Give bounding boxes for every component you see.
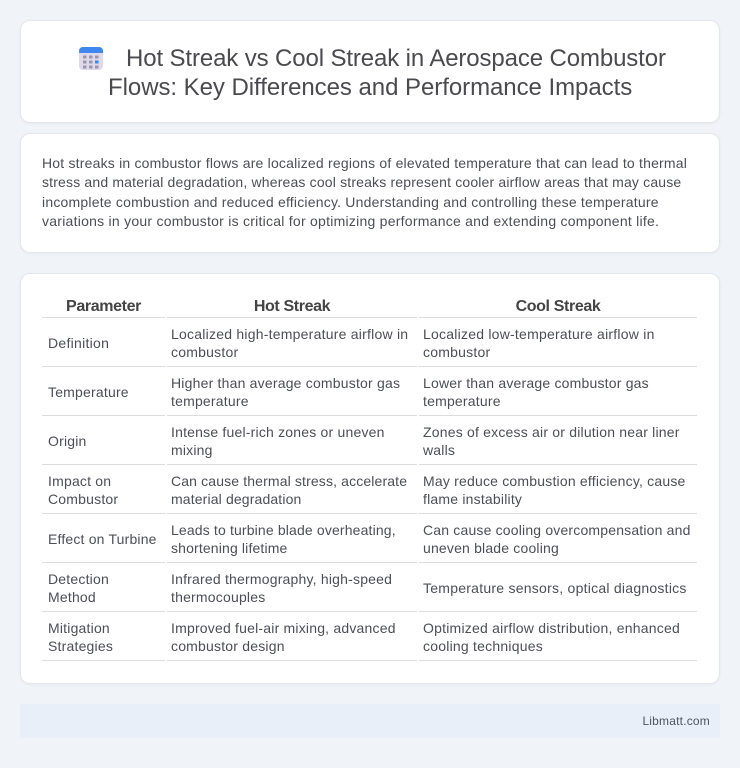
footer bar [20,704,720,738]
row: effect on turbine: uneven blade cooling [423,540,559,556]
row: mitigation strategies: Optimized airflow distribution, enhanced [423,620,680,636]
row: impact on combustor: Impact on [48,473,111,489]
row: temperature: Temperature [48,384,129,400]
row: origin [48,424,680,458]
intro text: Hot streaks in combustor flows are localized regions of elevated temperature that can lead to thermal [42,155,687,171]
table header [66,298,601,315]
row: origin: Origin [48,433,87,449]
row: definition: Localized low-temperature airflow in [423,326,655,342]
title: Flows: Key Differences and Performance Impacts [108,74,632,101]
title [108,45,666,101]
row: mitigation strategies: combustor design [171,638,285,654]
row: detection method: Infrared thermography, high-speed [171,571,392,587]
row: definition: combustor [423,344,490,360]
row: origin: walls [423,442,455,458]
intro text: variations in your combustor is critical for optimizing performance and extending component life. [42,213,659,229]
row: detection method: Method [48,589,96,605]
row: detection method: Detection [48,571,109,587]
row: definition: Localized high-temperature airflow in [171,326,408,342]
row: temperature: temperature [171,393,249,409]
row: impact on combustor: Can cause thermal stress, accelerate [171,473,407,489]
row: effect on turbine: Leads to turbine blade overheating, [171,522,396,538]
row: effect on turbine [48,522,691,556]
row: origin: mixing [171,442,213,458]
row: detection method: thermocouples [171,589,265,605]
row: temperature [48,375,649,409]
icon: calendar [79,47,103,70]
row: mitigation strategies: Improved fuel-air mixing, advanced [171,620,396,636]
row: origin: Zones of excess air or dilution near liner [423,424,680,440]
row: temperature: Lower than average combustor gas [423,375,649,391]
table header: Parameter [66,298,141,315]
row: definition: combustor [171,344,238,360]
row: mitigation strategies: Mitigation [48,620,110,636]
table header: Cool Streak [516,298,600,315]
header panel [20,20,720,123]
row: mitigation strategies [48,620,680,654]
intro text: incomplete combustion and reduced efficiency. Understanding and controlling these temperature [42,194,659,210]
intro panel [20,133,720,253]
row: definition [48,326,655,360]
row: mitigation strategies: Strategies [48,638,113,654]
row: impact on combustor [48,473,686,507]
row: effect on turbine: Can cause cooling overcompensation and [423,522,691,538]
row: detection method: Temperature sensors, optical diagnostics [423,580,687,596]
intro text [42,155,687,229]
row: impact on combustor: material degradation [171,491,301,507]
intro text: stress and material degradation, whereas cool streaks represent cooler airflow areas that may cause [42,174,681,190]
row: origin: Intense fuel-rich zones or uneven [171,424,385,440]
row: effect on turbine: Effect on Turbine [48,531,157,547]
panel: comparison table [20,273,720,684]
row: mitigation strategies: cooling techniques [423,638,543,654]
row: impact on combustor: May reduce combustion efficiency, cause [423,473,686,489]
row: effect on turbine: shortening lifetime [171,540,287,556]
table header: Hot Streak [254,298,330,315]
row: impact on combustor: Combustor [48,491,118,507]
footer text: Libmatt.com [642,714,710,728]
row: detection method [48,571,687,605]
row: temperature: temperature [423,393,501,409]
title: Hot Streak vs Cool Streak in Aerospace Combustor [126,45,666,72]
row: temperature: Higher than average combustor gas [171,375,400,391]
row: impact on combustor: flame instability [423,491,522,507]
row: definition: Definition [48,335,109,351]
